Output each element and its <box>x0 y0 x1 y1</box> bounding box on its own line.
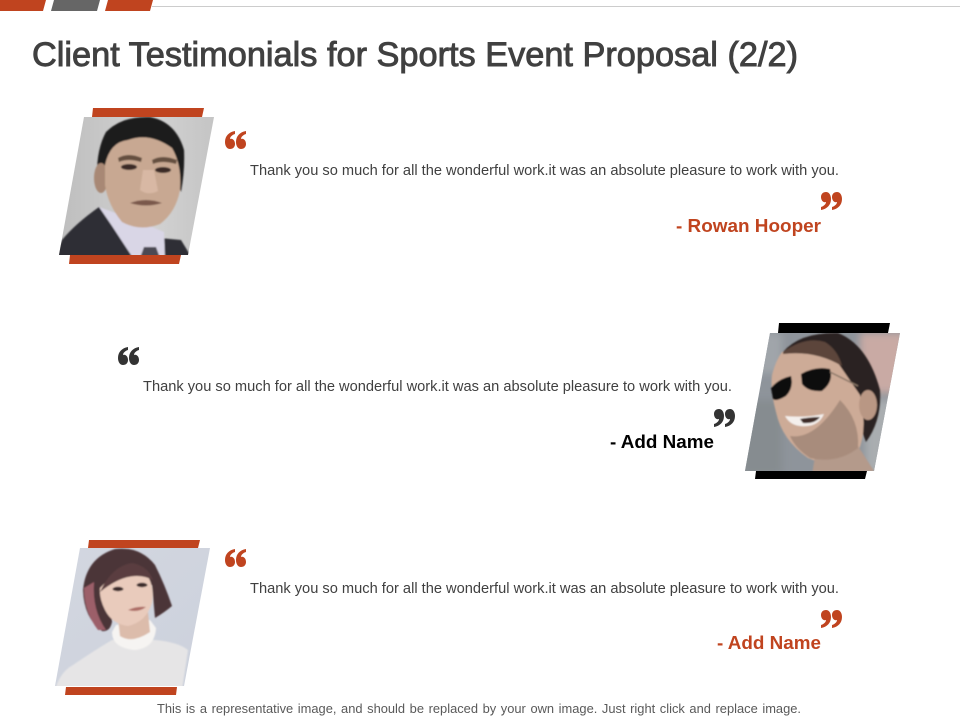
testimonial 2 <box>118 323 905 479</box>
footer note: This is a representative image, and should be replaced by your own image. Just right click and replace image. <box>157 702 801 716</box>
closing quote mark <box>821 192 842 210</box>
name: - Add Name <box>717 633 821 653</box>
name: - Rowan Hooper <box>676 216 821 236</box>
name: - Add Name <box>610 432 714 452</box>
testimonial text: Thank you so much for all the wonderful work.it was an absolute pleasure to work with you. <box>250 581 839 597</box>
opening quote mark <box>118 347 139 365</box>
opening quote mark <box>225 131 246 149</box>
opening quote mark <box>225 549 246 567</box>
portrait 2 accent bars <box>755 323 890 479</box>
portrait 1: man in pinstripe suit <box>55 115 217 258</box>
closing quote mark <box>714 409 735 427</box>
portrait 3 accent bars <box>65 540 200 695</box>
portrait 1 accent bars <box>69 108 204 264</box>
testimonial 1 <box>55 108 842 264</box>
closing quote mark <box>821 610 842 628</box>
header accent bars <box>0 0 960 11</box>
testimonial text: Thank you so much for all the wonderful work.it was an absolute pleasure to work with you. <box>143 379 732 395</box>
portrait 3: woman with short hair <box>52 546 212 690</box>
portrait 2: smiling man in sunglasses <box>742 331 905 475</box>
testimonial 3 <box>52 540 842 695</box>
testimonial text: Thank you so much for all the wonderful work.it was an absolute pleasure to work with you. <box>250 163 839 179</box>
title: Client Testimonials for Sports Event Proposal (2/2) <box>32 36 798 74</box>
